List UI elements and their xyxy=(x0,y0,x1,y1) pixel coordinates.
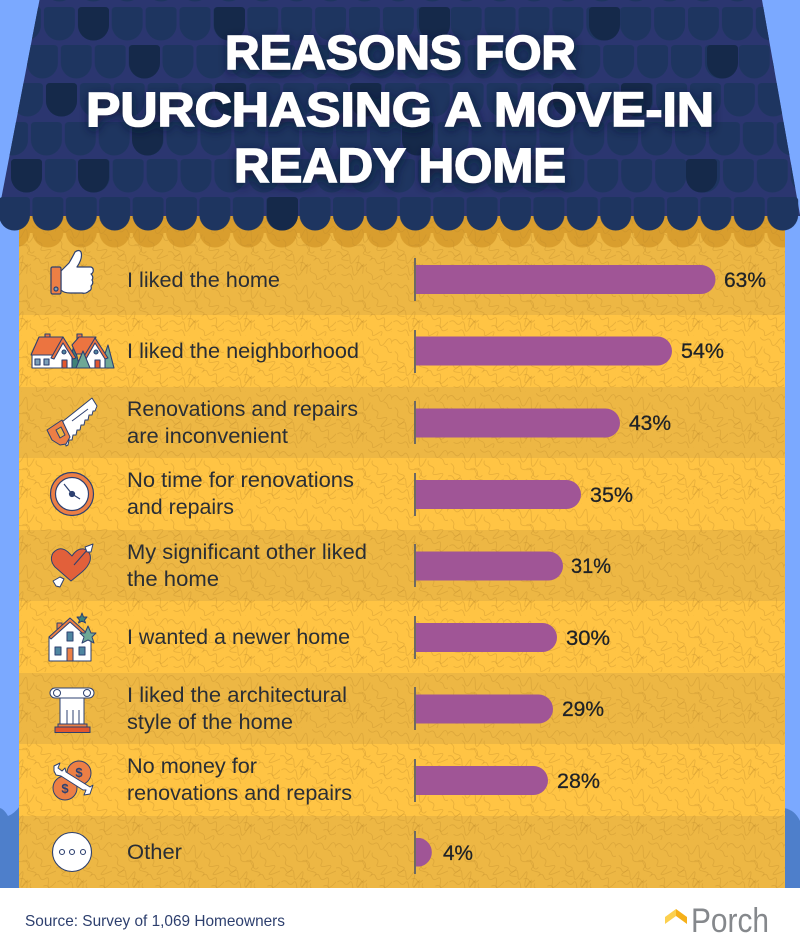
bar 29% xyxy=(415,694,553,724)
dollar signs: $ xyxy=(61,781,69,796)
label: Renovations and repairs xyxy=(127,398,358,421)
axis tick xyxy=(414,330,416,373)
value: 30% xyxy=(566,627,610,650)
row: I liked the home xyxy=(51,250,766,301)
label: No time for renovations xyxy=(127,469,354,492)
row: I liked the neighborhood xyxy=(31,330,724,373)
label: I liked the neighborhood xyxy=(127,340,359,363)
value: 28% xyxy=(557,770,600,793)
icon: classical column xyxy=(50,688,94,732)
bar 30% xyxy=(415,623,557,652)
value: 63% xyxy=(724,269,766,292)
bar 4% xyxy=(415,838,432,866)
title: READY HOME xyxy=(234,140,566,193)
bar 35% xyxy=(415,480,581,509)
label: I liked the architectural xyxy=(127,684,347,707)
bar 54% xyxy=(415,336,672,366)
value: 4% xyxy=(443,842,473,865)
icon: thumbs up xyxy=(51,250,93,294)
label: My significant other liked xyxy=(127,541,367,564)
house wall with row bands xyxy=(0,205,800,888)
bar 43% xyxy=(415,408,620,438)
row: My significant other liked the home xyxy=(51,541,611,591)
icon: neighborhood houses xyxy=(31,334,114,368)
footer background xyxy=(0,888,800,951)
dollar signs xyxy=(61,765,83,796)
value: 54% xyxy=(681,340,724,363)
bar 31% xyxy=(415,552,563,580)
source note: Source: Survey of 1,069 Homeowners xyxy=(25,913,285,930)
row: My significant other liked the home: the home xyxy=(127,568,219,591)
distant hills xyxy=(0,806,800,888)
row: I liked the architectural style of the home: style of the home xyxy=(127,711,293,734)
roof xyxy=(0,0,800,231)
axis tick xyxy=(414,258,416,301)
value: 35% xyxy=(590,484,633,507)
axis tick xyxy=(414,831,416,874)
icon: heart with arrow xyxy=(51,544,93,587)
icon: ellipsis bubble xyxy=(52,832,92,872)
label: I wanted a newer home xyxy=(127,626,350,649)
row: No money for renovations and repairs xyxy=(53,755,600,805)
row: Other xyxy=(52,831,473,874)
bar 28% xyxy=(415,766,548,795)
axis tick xyxy=(414,687,416,730)
title: PURCHASING A MOVE-IN xyxy=(86,84,714,137)
label: I liked the home xyxy=(127,269,280,292)
axis tick xyxy=(414,473,416,516)
row: Renovations and repairs are inconvenient xyxy=(47,398,671,448)
title xyxy=(86,27,714,193)
value: 29% xyxy=(562,698,604,721)
icon: new house with stars xyxy=(49,613,96,661)
row: Renovations and repairs are inconvenient: are inconvenient xyxy=(127,425,288,448)
axis tick xyxy=(414,616,416,659)
wordmark: Porch xyxy=(691,902,769,940)
axis tick xyxy=(414,544,416,587)
row: I wanted a newer home xyxy=(49,613,610,661)
Porch logo xyxy=(665,902,769,940)
title: REASONS FOR xyxy=(225,27,576,80)
bar 63% xyxy=(415,265,716,294)
row: No time for renovations and repairs: and repairs xyxy=(127,496,234,519)
dollar signs: $ xyxy=(75,765,83,780)
axis tick xyxy=(414,401,416,444)
icon: chevron xyxy=(665,909,687,924)
value: 43% xyxy=(629,412,671,435)
icon: wrench and coins xyxy=(53,761,93,800)
row: No money for renovations and repairs: renovations and repairs xyxy=(127,782,352,805)
row: I liked the architectural style of the home xyxy=(50,684,604,734)
label: No money for xyxy=(127,755,257,778)
row: No time for renovations and repairs xyxy=(50,469,633,519)
axis tick xyxy=(414,759,416,802)
value: 31% xyxy=(571,555,611,578)
icon: hand saw xyxy=(47,398,97,446)
label: Other xyxy=(127,841,182,864)
icon: clock xyxy=(50,472,94,516)
